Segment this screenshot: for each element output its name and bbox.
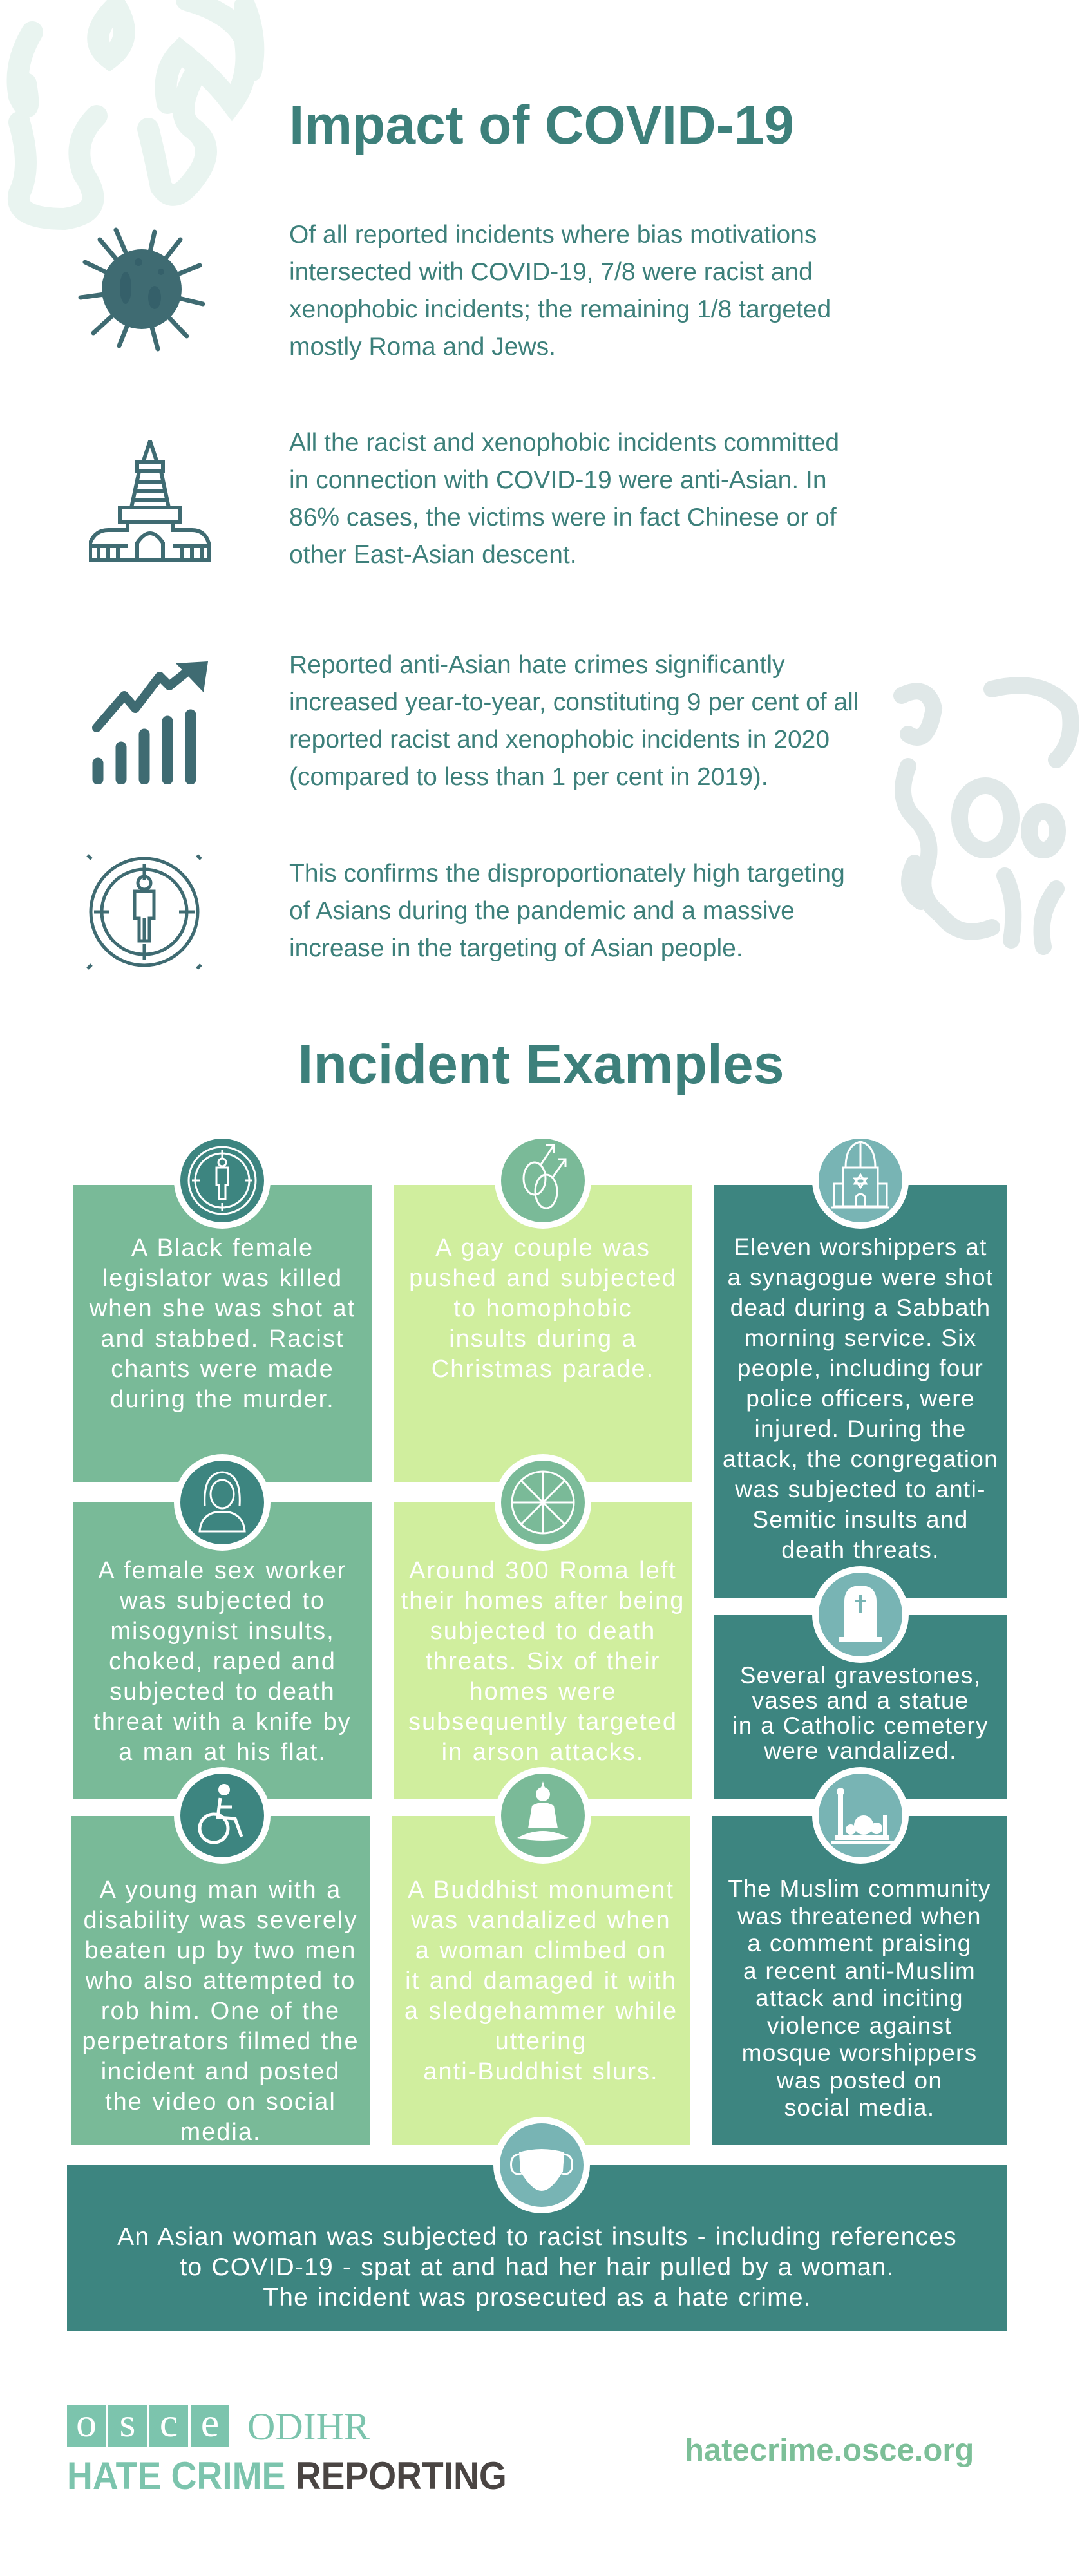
panel: Buddhist monument: uttering	[495, 2028, 587, 2055]
panel: female sex worker: subjected to death	[109, 1678, 336, 1705]
panel: disability: beaten up by two men	[85, 1937, 356, 1964]
panel: female sex worker: misogynist insults,	[110, 1618, 335, 1645]
panel: Buddhist monument	[392, 1816, 690, 2145]
panel: female sex worker: was subjected to	[120, 1587, 325, 1615]
panel: disability: perpetrators filmed the	[82, 2028, 359, 2055]
footer logo: OSCE ODIHR: ODIHR	[247, 2405, 370, 2448]
panel: cemetery: vases and a statue	[752, 1687, 969, 1714]
panel: Muslim community: social media.	[784, 2094, 935, 2121]
text: paragraph 2: other East-Asian descent.	[289, 541, 577, 569]
panel: synagogue: police officers, were	[746, 1385, 975, 1412]
text: paragraph 4: increase in the targeting of Asian people.	[289, 934, 743, 962]
panel: cemetery: were vandalized.	[764, 1738, 957, 1764]
panel: gay couple: pushed and subjected	[409, 1265, 677, 1292]
panel: Buddhist monument: a woman climbed on	[415, 1937, 667, 1964]
panel: synagogue: Eleven worshippers at	[734, 1234, 987, 1260]
panel: Roma: in arson attacks.	[442, 1739, 644, 1766]
footer logo: OSCE ODIHR	[67, 2400, 370, 2448]
panel: disability	[71, 1816, 370, 2145]
panel: Muslim community: The Muslim community	[728, 1875, 991, 1902]
panel: Black female legislator: during the murder.	[110, 1386, 335, 1413]
icon circle: male symbols	[495, 1139, 591, 1229]
panel: Black female legislator	[73, 1185, 372, 1482]
icon circle: wheel	[495, 1454, 591, 1551]
panel: female sex worker: a man at his flat.	[119, 1739, 327, 1766]
panel: disability: who also attempted to	[86, 1967, 356, 1994]
panel: Asian woman (bottom): to COVID-19 - spat at and had her hair pulled by a woman.	[180, 2253, 895, 2281]
panel: cemetery	[714, 1615, 1007, 1799]
panel: Asian woman (bottom): An Asian woman was subjected to racist insults - including references	[117, 2223, 957, 2251]
panel: Roma: threats. Six of their	[426, 1648, 660, 1675]
text: paragraph 3: Reported anti-Asian hate crimes significantly	[289, 651, 785, 679]
text: paragraph 1: intersected with COVID-19, 7/8 were racist and	[289, 258, 813, 286]
footer logo: OSCE ODIHR: o	[76, 2400, 97, 2445]
panel: Buddhist monument: anti-Buddhist slurs.	[423, 2058, 659, 2085]
panel: female sex worker	[73, 1502, 372, 1799]
text: paragraph 4: This confirms the disproportionately high targeting	[289, 860, 845, 887]
text: paragraph 1	[289, 221, 831, 361]
text: paragraph 2: All the racist and xenophobic incidents committed	[289, 429, 839, 457]
panel: Roma: subjected to death	[430, 1618, 656, 1645]
background decoration: virus top-left	[6, 0, 264, 230]
panel: synagogue: Semitic insults and	[752, 1506, 969, 1533]
footer: website: hatecrime.osce.org	[685, 2433, 974, 2468]
panel: Roma: homes were	[469, 1678, 616, 1705]
text: paragraph 4	[289, 860, 845, 962]
text: paragraph 3: increased year-to-year, constituting 9 per cent of all	[289, 688, 859, 716]
panel: synagogue: attack, the congregation	[723, 1446, 998, 1472]
footer: HATE CRIME REPORTING: HATE CRIME REPORTING	[67, 2454, 507, 2497]
panel: gay couple: A gay couple was	[435, 1235, 650, 1262]
text: paragraph 3	[289, 651, 859, 791]
panel: disability: incident and posted	[101, 2058, 340, 2085]
panel: disability: rob him. One of the	[101, 1998, 340, 2025]
icon: virus	[79, 228, 205, 352]
panel: gay couple: Christmas parade.	[432, 1356, 654, 1383]
panel: Roma	[394, 1502, 692, 1799]
icon circle: woman	[174, 1454, 270, 1551]
panel: cemetery: in a Catholic cemetery	[732, 1712, 989, 1739]
panel: Buddhist monument: was vandalized when	[411, 1907, 671, 1934]
panel: Buddhist monument: a sledgehammer while	[404, 1998, 678, 2025]
panel: Roma: subsequently targeted	[408, 1709, 678, 1736]
panel: Black female legislator: chants were made	[111, 1356, 334, 1383]
text: paragraph 2: 86% cases, the victims were in fact Chinese or of	[289, 504, 837, 531]
icon circle: synagogue	[812, 1139, 909, 1229]
panel: synagogue: injured. During the	[754, 1416, 967, 1442]
icon circle: Buddha	[495, 1767, 591, 1864]
panel: synagogue: was subjected to anti-	[735, 1476, 986, 1502]
text: paragraph 1: xenophobic incidents; the remaining 1/8 targeted	[289, 296, 831, 323]
panel: synagogue: morning service. Six	[744, 1325, 977, 1351]
panel: gay couple: to homophobic	[453, 1295, 632, 1322]
panel: cemetery: Several gravestones,	[740, 1662, 981, 1689]
panel: Roma: Around 300 Roma left	[409, 1557, 677, 1584]
panel: Muslim community: violence against	[767, 2012, 952, 2039]
panel: Asian woman (bottom): The incident was prosecuted as a hate crime.	[263, 2284, 812, 2311]
panel: female sex worker: threat with a knife by	[93, 1709, 352, 1736]
footer logo: OSCE ODIHR: c	[160, 2400, 178, 2445]
panel: synagogue: dead during a Sabbath	[730, 1294, 991, 1321]
panel: disability: media.	[180, 2119, 261, 2146]
panel: synagogue	[714, 1185, 1007, 1598]
footer logo: OSCE ODIHR: s	[120, 2400, 135, 2445]
panel: Muslim community: was threatened when	[737, 1902, 982, 1929]
title: Impact of COVID-19	[289, 95, 794, 155]
text: paragraph 2	[289, 429, 839, 569]
panel: Asian woman (bottom)	[67, 2165, 1007, 2331]
icon circle: target person	[174, 1139, 270, 1229]
panel: Black female legislator: and stabbed. Racist	[101, 1325, 344, 1352]
panel: synagogue: death threats.	[781, 1537, 940, 1563]
text: paragraph 2: in connection with COVID-19 were anti-Asian. In	[289, 466, 827, 494]
heading: Incident Examples: Incident Examples	[298, 1034, 784, 1095]
panel: Muslim community: was posted on	[777, 2067, 942, 2093]
panel: Muslim community: attack and inciting	[755, 1985, 963, 2011]
icon circle: gravestone	[812, 1566, 909, 1663]
text: paragraph 1: Of all reported incidents where bias motivations	[289, 221, 817, 249]
panel: female sex worker: choked, raped and	[109, 1648, 336, 1675]
panel: synagogue: people, including four	[737, 1355, 983, 1381]
panel: Buddhist monument: A Buddhist monument	[408, 1877, 674, 1904]
footer logo: OSCE ODIHR: e	[201, 2400, 219, 2445]
panel: disability: A young man with a	[100, 1877, 341, 1904]
panel: synagogue: a synagogue were shot	[728, 1264, 993, 1291]
panel: Muslim community	[712, 1816, 1007, 2145]
panel: Buddhist monument: it and damaged it with	[405, 1967, 677, 1994]
panel: Black female legislator: legislator was killed	[102, 1265, 343, 1292]
panel: Roma: their homes after being	[401, 1587, 685, 1615]
panel: disability: disability was severely	[84, 1907, 357, 1934]
icon circle: mosque	[812, 1767, 909, 1864]
panel: gay couple	[394, 1185, 692, 1482]
icon: rising chart	[92, 661, 208, 784]
text: paragraph 4: of Asians during the pandemic and a massive	[289, 897, 795, 925]
panel: Black female legislator: when she was shot at	[90, 1295, 356, 1322]
text: paragraph 3: (compared to less than 1 per cent in 2019).	[289, 763, 768, 791]
text: paragraph 1: mostly Roma and Jews.	[289, 333, 556, 361]
icon: target person	[86, 854, 202, 970]
panel: gay couple: insults during a	[449, 1325, 637, 1352]
panel: Black female legislator: A Black female	[131, 1235, 314, 1262]
background decoration: virus right	[893, 677, 1079, 955]
panel: Muslim community: a recent anti-Muslim	[743, 1958, 976, 1984]
icon circle: wheelchair	[174, 1767, 270, 1864]
panel: Muslim community: mosque worshippers	[742, 2040, 977, 2066]
panel: female sex worker: A female sex worker	[98, 1557, 347, 1584]
icon: temple	[89, 440, 211, 562]
panel: disability: the video on social	[105, 2088, 336, 2116]
text: paragraph 3: reported racist and xenophobic incidents in 2020	[289, 726, 830, 753]
panel: Muslim community: a comment praising	[747, 1930, 972, 1956]
icon circle: face mask	[493, 2117, 590, 2213]
